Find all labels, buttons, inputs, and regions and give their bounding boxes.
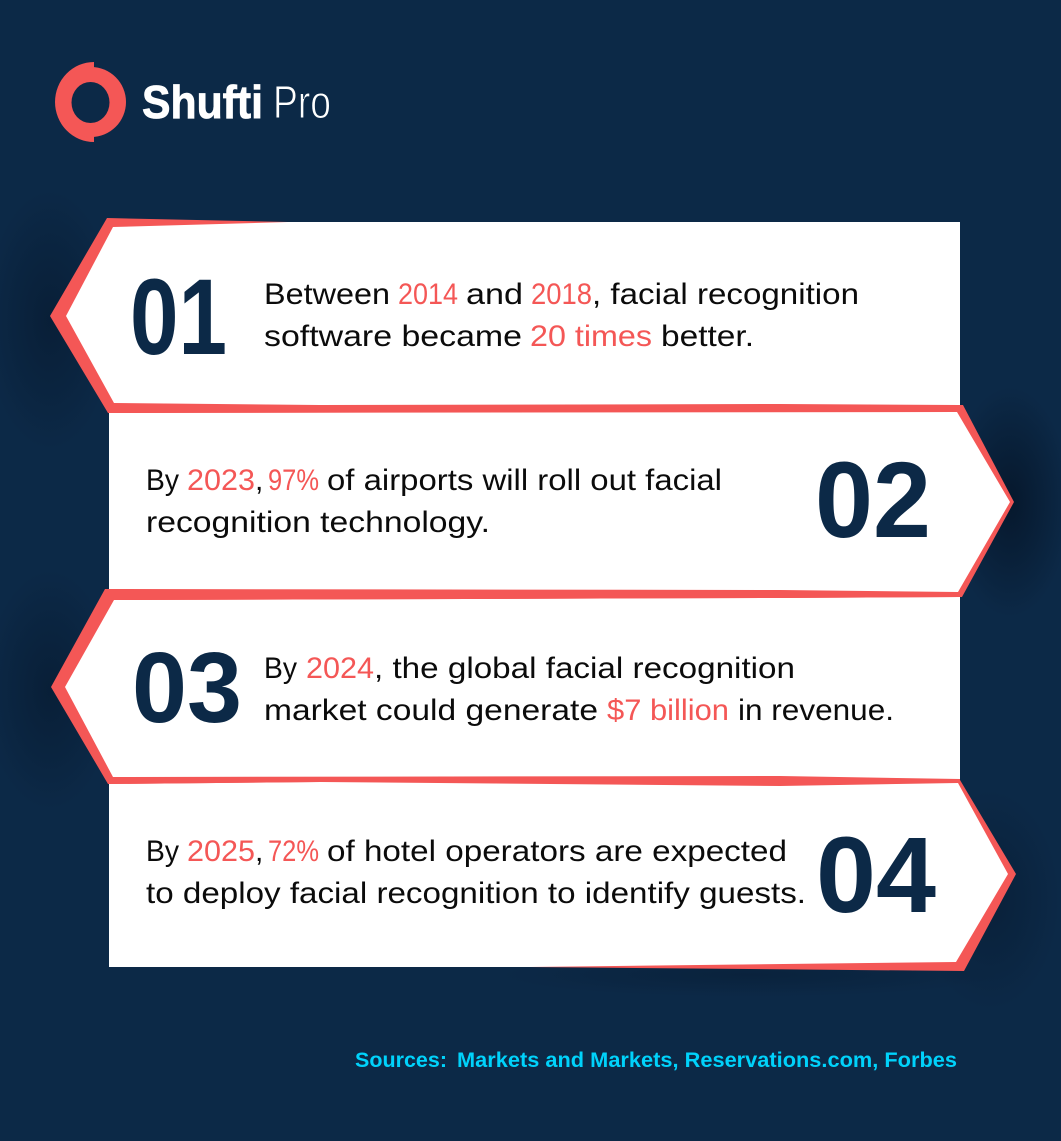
text 01	[264, 278, 859, 353]
panel 4	[109, 776, 1016, 971]
text 03: $7 billion	[607, 694, 729, 727]
text 01: 2018	[531, 278, 592, 311]
white arrow body 02	[109, 412, 1010, 592]
sources line: Markets and Markets, Reservations.com, Forbes	[457, 1049, 957, 1072]
text 01: 20 times	[530, 320, 652, 353]
text 04: 2025	[187, 835, 255, 868]
text 01: , facial recognition	[592, 278, 859, 311]
text 01: software became	[264, 320, 522, 353]
text 04	[146, 835, 806, 910]
text 03: 2024	[306, 652, 374, 685]
arrow frame 01	[50, 218, 960, 413]
number 03: 03	[132, 632, 242, 744]
sources line: Sources:	[355, 1049, 447, 1072]
text 02: 2023	[187, 464, 255, 497]
number 02: 02	[815, 439, 931, 560]
arrow frame 04	[109, 776, 1016, 971]
white arrow body 04	[109, 782, 1008, 967]
text 03: market could generate	[264, 694, 598, 727]
logo wordmark	[142, 76, 331, 128]
text 03: , the global facial recognition	[374, 652, 795, 685]
text 01: Between	[264, 278, 390, 311]
text 01: and	[466, 278, 523, 311]
text 02: 97%	[268, 464, 319, 497]
arrow frame 02	[109, 404, 1014, 600]
white arrow body 03	[65, 597, 960, 779]
text 04: ,	[255, 835, 263, 868]
arrow frame 03	[51, 589, 960, 784]
text 03	[264, 652, 894, 727]
text 04: to deploy facial recognition to identify guests.	[146, 877, 806, 910]
white arrow body 01	[66, 222, 960, 405]
text 02	[146, 464, 722, 539]
text 04: By	[146, 835, 179, 868]
text 03: By	[264, 652, 297, 685]
logo: Shufti Pro	[55, 62, 331, 142]
text 03: in revenue.	[738, 694, 894, 727]
number 04: 04	[816, 814, 936, 935]
text 02: of airports will roll out facial	[327, 464, 722, 497]
text 01: 2014	[398, 278, 458, 311]
logo wordmark: Pro	[273, 76, 331, 128]
text 02: recognition technology.	[146, 506, 490, 539]
text 02: ,	[255, 464, 263, 497]
panel 2	[109, 404, 1014, 600]
text 02: By	[146, 464, 179, 497]
text 04: 72%	[268, 835, 319, 868]
panel 3	[51, 589, 960, 784]
logo wordmark: Shufti	[142, 76, 263, 128]
number 01: 01	[130, 256, 227, 377]
text 04: of hotel operators are expected	[327, 835, 787, 868]
icon: logo ring	[55, 62, 126, 142]
text 01: better.	[661, 320, 754, 353]
panel 1	[50, 218, 960, 413]
